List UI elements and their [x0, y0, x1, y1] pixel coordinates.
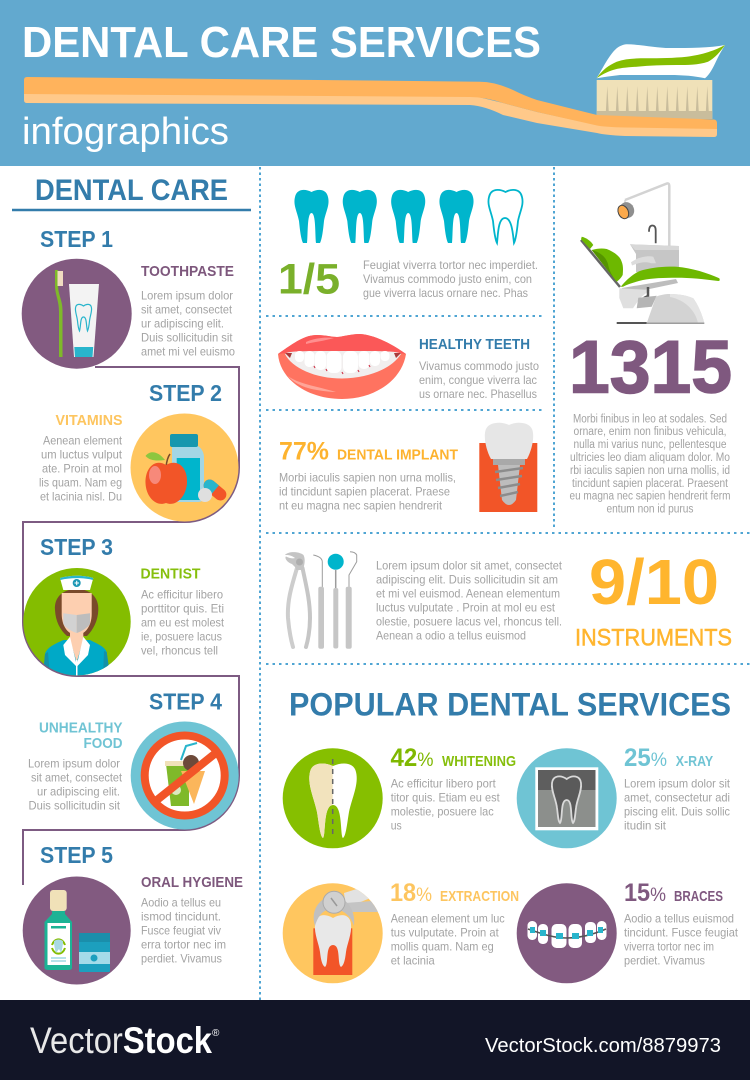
- panel: dental implant: [279, 423, 537, 513]
- step 5: STEP 5: [40, 842, 113, 868]
- text: step 3 body: porttitor quis. Eti: [141, 602, 224, 616]
- text: step 5 body: [141, 896, 226, 966]
- source url: VectorStock.com/8879973: [485, 1035, 721, 1057]
- text: instruments body: Aenean a odio a tellus euismod: [376, 628, 526, 642]
- text: extraction body: et lacinia: [391, 953, 435, 967]
- step 2: STEP 2: [149, 380, 222, 406]
- text: step 1 body: Duis sollicitudin sit: [141, 330, 233, 344]
- heading: 18% extraction: EXTRACTION: [440, 888, 519, 905]
- text: one in five body: Feugiat viverra tortor nec imperdiet.: [363, 258, 538, 272]
- icon: toothbrush and toothpaste: [22, 259, 132, 369]
- step 3: DENTIST: [140, 566, 200, 583]
- step 1: [22, 226, 235, 369]
- text: braces body: [624, 911, 739, 967]
- text: step 2 body: lis quam. Nam eg: [39, 475, 122, 489]
- icon: no unhealthy food: [131, 722, 239, 830]
- text: step 1 body: amet mi vel euismo: [141, 344, 235, 358]
- text: extraction body: Aenean element um luc: [391, 911, 505, 925]
- heading: 15% braces: 15%: [624, 879, 666, 907]
- panel: dental care steps: [12, 174, 251, 984]
- icon: braces: [517, 883, 617, 983]
- step 3: [23, 534, 225, 676]
- icon: vitamins: [130, 414, 238, 522]
- heading: 77% dental implant: DENTAL IMPLANT: [337, 446, 458, 464]
- text: chair body: ultricies leo diam aliquam dolor. Mo: [570, 452, 730, 464]
- text: step 4 body: Duis sollicitudin sit: [28, 799, 121, 813]
- panel: extraction: [283, 879, 519, 983]
- text: implant body: Morbi iaculis sapien non urna mollis,: [279, 471, 456, 485]
- text: step 1 body: sit amet, consectet: [141, 302, 233, 316]
- text: braces body: viverra tortor nec im: [624, 939, 714, 953]
- text: one in five body: Vivamus commodo justo enim, con: [363, 272, 532, 286]
- heading: 77% dental implant: 77%: [279, 437, 329, 465]
- text: extraction body: tus vulputate. Proin at: [391, 925, 499, 939]
- text: instruments body: [376, 558, 563, 642]
- text: implant body: nt eu magna nec sapien hendrerit: [279, 499, 443, 513]
- text: instruments body: olestie, posuere lacus vel, rhoncus tell.: [376, 614, 562, 628]
- header band: [0, 0, 750, 166]
- text: step 3 body: [141, 588, 225, 658]
- text: step 2 body: Aenean element: [43, 433, 123, 447]
- text: step 4 body: sit amet, consectet: [31, 771, 123, 785]
- step connector line: [23, 367, 239, 885]
- text: unhealthy food heading: UNHEALTHY: [39, 720, 122, 737]
- text: instruments body: Lorem ipsum dolor sit amet, consectet: [376, 558, 563, 572]
- text: braces body: tincidunt. Fusce feugiat: [624, 925, 739, 939]
- text: step 2 body: um luctus vulput: [41, 447, 123, 461]
- text: implant body: id tincidunt sapien placerat. Praese: [279, 485, 450, 499]
- text: instruments body: et mi vel euismod. Aenean elementum: [376, 586, 560, 600]
- text: whitening body: Ac efficitur libero port: [391, 777, 496, 791]
- text: healthy teeth body: Vivamus commodo justo: [419, 359, 539, 373]
- text: chair body: entum non id purus: [606, 504, 694, 516]
- text: whitening body: molestie, posuere lac: [391, 805, 494, 819]
- text: unhealthy food heading: [39, 720, 123, 752]
- icon: implant: [479, 423, 537, 512]
- panel: one in five: [278, 190, 538, 303]
- text: extraction body: mollis quam. Nam eg: [391, 939, 494, 953]
- icon: mouthwash and floss: [23, 876, 131, 984]
- footer bar: ®: [212, 1028, 220, 1039]
- icon: dental chair: [581, 183, 720, 324]
- text: chair body: tincidunt sapien placerat. Praesent: [572, 478, 729, 490]
- icon: smiling lips: [278, 334, 406, 399]
- text: x-ray body: itudin sit: [624, 819, 667, 833]
- text: step 3 body: vel, rhoncus tell: [141, 644, 218, 658]
- step 4: STEP 4: [149, 688, 222, 714]
- heading: 25% x-ray: 25%: [624, 744, 667, 772]
- step 2: [39, 380, 238, 522]
- heading: 42% whitening: WHITENING: [442, 753, 516, 770]
- panel: instruments: [285, 546, 732, 652]
- logo text: VectorStock: [30, 1020, 212, 1061]
- text: step 5 body: Fusce feugiat viv: [141, 924, 221, 938]
- text: instruments body: luctus vulputate . Proin at mol eu est: [376, 600, 556, 614]
- panel: whitening: [283, 744, 516, 848]
- text: healthy teeth body: us ornare nec. Phasellus: [419, 387, 537, 401]
- text: braces body: perdiet. Vivamus: [624, 953, 705, 967]
- text: chair body: ornare, enim non finibus vehicula,: [574, 426, 726, 438]
- text: instruments body: adipiscing elit. Duis sollicitudin sit am: [376, 572, 558, 586]
- heading: 18% extraction: [390, 879, 519, 907]
- text: step 1 body: Lorem ipsum dolor: [141, 288, 233, 302]
- text: extraction body: [391, 911, 505, 967]
- text: chair body: nulla mi varius nunc, pellentesque: [574, 439, 726, 451]
- dotted dividers: [260, 167, 750, 1000]
- icon: dentist: [23, 568, 131, 676]
- heading: 42% whitening: 42%: [390, 744, 434, 772]
- panel: dental chair 1315: [569, 183, 732, 516]
- step 2: VITAMINS: [56, 412, 122, 429]
- heading: 25% x-ray: X-RAY: [676, 753, 713, 770]
- text: step 2 body: et lacinia nisl. Du: [40, 489, 122, 503]
- step 1: STEP 1: [40, 226, 113, 252]
- icon: x-ray: [517, 748, 617, 848]
- text: step 4 body: [28, 757, 123, 813]
- text: unhealthy food heading: FOOD: [84, 735, 123, 752]
- text: step 5 body: Aodio a tellus eu: [141, 896, 221, 910]
- panel: braces: [517, 879, 739, 983]
- heading: 18% extraction: 18%: [390, 879, 432, 907]
- panel: one in five: 1/5: [278, 255, 340, 303]
- heading: 15% braces: BRACES: [674, 888, 723, 905]
- text: one in five body: [363, 258, 538, 300]
- text: whitening body: us: [391, 819, 402, 833]
- text: step 1 body: ur adipiscing elit.: [141, 316, 224, 330]
- text: step 5 body: perdiet. Vivamus: [141, 952, 222, 966]
- text: step 5 body: erra tortor nec im: [141, 938, 226, 952]
- text: step 4 body: ur adipiscing elit.: [37, 785, 120, 799]
- footer bar: [0, 1000, 750, 1080]
- text: whitening body: titor quis. Etiam eu est: [391, 791, 500, 805]
- text: x-ray body: piscing elit. Duis sollic: [624, 805, 730, 819]
- subtitle: infographics: [22, 111, 229, 153]
- panel: instruments: INSTRUMENTS: [575, 625, 732, 652]
- text: braces body: Aodio a tellus euismod: [624, 911, 734, 925]
- text: implant body: [279, 471, 456, 513]
- heading: dental care: DENTAL CARE: [35, 174, 228, 207]
- heading: 25% x-ray: [624, 744, 713, 772]
- step 1: TOOTHPASTE: [141, 263, 234, 280]
- text: healthy teeth body: enim, congue viverra lac: [419, 373, 537, 387]
- text: step 3 body: ie, posuere lacus: [141, 630, 222, 644]
- text: whitening body: [391, 777, 500, 833]
- text: healthy teeth body: [419, 359, 539, 401]
- heading: 42% whitening: [390, 744, 516, 772]
- text: step 4 body: Lorem ipsum dolor: [28, 757, 120, 771]
- icon: tooth extraction: [283, 880, 385, 983]
- text: chair body: rbi iaculis sapien non urna mollis, id: [570, 465, 730, 477]
- panel: healthy teeth: HEALTHY TEETH: [419, 336, 530, 353]
- text: x-ray body: amet, consectetur adi: [624, 791, 730, 805]
- text: chair body: [570, 413, 730, 516]
- heading: 15% braces: [624, 879, 723, 907]
- text: one in five body: gue viverra lacus ornare nec. Phas: [363, 286, 528, 300]
- icon: whitening tooth: [283, 748, 383, 848]
- text: x-ray body: Lorem ipsum dolor sit: [624, 777, 731, 791]
- panel: x-ray: [517, 744, 731, 848]
- text: step 1 body: [141, 288, 235, 358]
- panel: instruments: 9/10: [589, 546, 719, 618]
- step 5: ORAL HYGIENE: [141, 874, 243, 891]
- text: step 2 body: [39, 433, 123, 503]
- text: x-ray body: [624, 777, 731, 833]
- panel: dental chair 1315: 1315: [569, 326, 732, 409]
- heading: popular dental services: POPULAR DENTAL SERVICES: [289, 687, 731, 723]
- step 4: [28, 688, 239, 830]
- heading: 77% dental implant: [279, 437, 458, 465]
- text: chair body: eu magna nec sapien hendrerit ferm: [570, 491, 730, 503]
- icon: dental instruments: [285, 552, 357, 649]
- icon: toothbrush: [24, 44, 725, 137]
- panel: healthy teeth: [278, 334, 539, 401]
- step 3: STEP 3: [40, 534, 113, 560]
- step 5: [23, 842, 243, 984]
- text: step 2 body: ate. Proin at mol: [42, 461, 122, 475]
- title: DENTAL CARE SERVICES: [22, 18, 541, 67]
- icon: row of teeth: [294, 190, 523, 243]
- text: step 3 body: am eu est molest: [141, 616, 225, 630]
- text: step 5 body: ismod tincidunt.: [141, 910, 221, 924]
- text: chair body: Morbi finibus in leo at sodales. Sed: [573, 413, 727, 425]
- text: step 3 body: Ac efficitur libero: [141, 588, 223, 602]
